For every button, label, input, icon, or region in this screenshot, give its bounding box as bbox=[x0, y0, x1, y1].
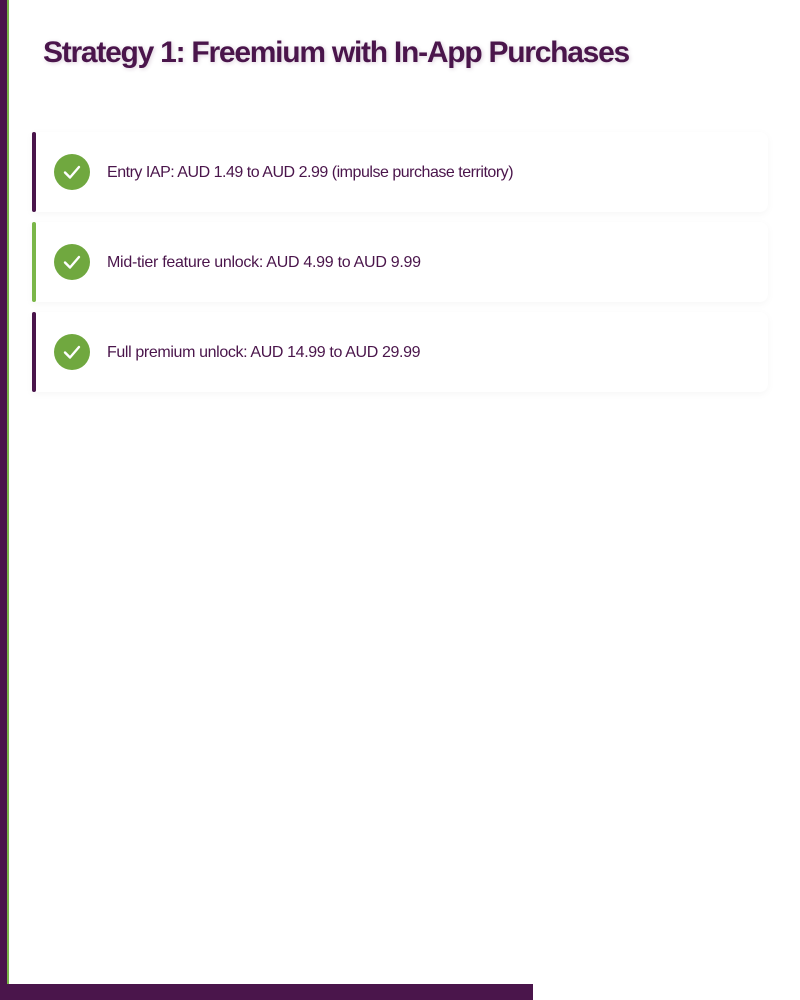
item text: Full premium unlock: AUD 14.99 to AUD 29.99 bbox=[107, 344, 420, 361]
panel: entry IAP item bbox=[32, 132, 768, 212]
title: Strategy 1: Freemium with In-App Purchases bbox=[43, 36, 629, 69]
panel: full premium item bbox=[32, 312, 768, 392]
panel: mid-tier item bbox=[32, 222, 768, 302]
icon: check circle bbox=[54, 244, 90, 280]
icon: check circle bbox=[54, 334, 90, 370]
item text: Mid-tier feature unlock: AUD 4.99 to AUD 9.99 bbox=[107, 254, 421, 271]
left accent border bbox=[0, 0, 9, 1000]
item text: Entry IAP: AUD 1.49 to AUD 2.99 (impulse purchase territory) bbox=[107, 164, 513, 181]
bottom bar bbox=[0, 984, 533, 1000]
icon: check circle bbox=[54, 154, 90, 190]
